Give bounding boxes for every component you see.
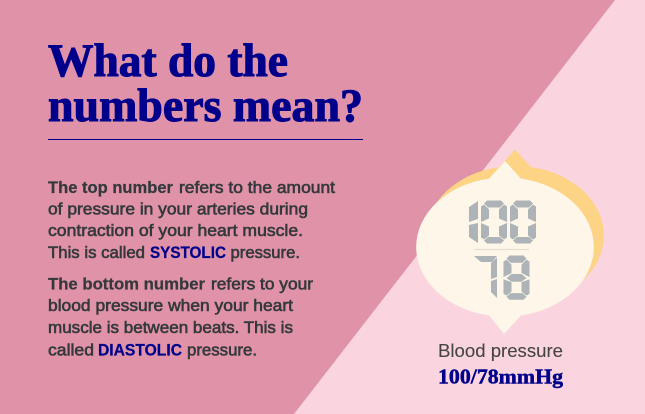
text block: diastolic explanation: blood pressure when your heart	[48, 297, 293, 315]
text block: systolic explanation: refers to the amount	[179, 179, 335, 197]
text block: diastolic explanation: pressure.	[187, 342, 257, 360]
text block: diastolic explanation: called	[48, 342, 94, 360]
caption: blood pressure value: 100/78mmHg	[438, 364, 563, 388]
text block: systolic explanation: SYSTOLIC	[150, 244, 226, 262]
orange shadow shape	[426, 150, 604, 322]
text block: systolic explanation: contraction of your heart muscle.	[48, 222, 303, 240]
LCD reading: 78	[474, 256, 530, 300]
text block: systolic explanation: of pressure in your arteries during	[48, 200, 308, 218]
LCD reading: 100	[469, 200, 536, 244]
title: What do the	[48, 35, 288, 87]
cream display shape	[416, 161, 594, 334]
text block: diastolic explanation: muscle is between beats. This is	[48, 319, 293, 337]
text block: diastolic explanation: The bottom number	[48, 276, 206, 294]
text block: systolic explanation: pressure.	[230, 244, 300, 262]
text block: diastolic explanation	[48, 276, 314, 360]
text block: diastolic explanation: DIASTOLIC	[98, 342, 182, 360]
title: numbers mean?	[48, 80, 363, 132]
icon: blood pressure monitor display	[416, 150, 604, 334]
text block: systolic explanation: The top number	[48, 179, 174, 197]
text block: systolic explanation	[48, 179, 335, 262]
caption: blood pressure label: Blood pressure	[438, 341, 563, 361]
text block: systolic explanation: This is called	[48, 244, 145, 262]
text block: diastolic explanation: refers to your	[211, 276, 314, 294]
title	[48, 35, 363, 132]
